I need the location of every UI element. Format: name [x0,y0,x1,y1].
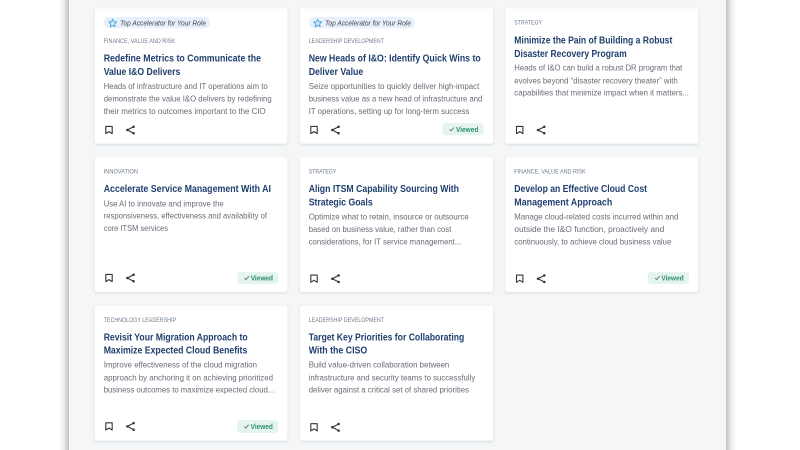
icon: bookmark [311,275,317,282]
card description: infrastructure and security teams to successfully [309,372,476,382]
icon: bookmark [106,423,112,430]
card: Develop Cloud Cost [505,157,698,292]
card title: Management Approach [514,197,612,208]
card: New Heads of I&O [300,8,493,144]
card description: deliver against a critical set of shared priorities [309,385,469,395]
icon: bookmark [311,424,317,431]
category: LEADERSHIP DEVELOPMENT [309,39,384,45]
card description: approach by anchoring it on achieving prioritized [104,372,273,382]
badge: top accelerator: Top Accelerator for Your Role [120,19,206,28]
category: TECHNOLOGY LEADERSHIP [104,318,176,324]
badge: top accelerator [104,17,210,28]
card description: responsiveness, effectiveness and availability of [104,211,268,221]
card: Revisit Migration [94,306,288,441]
icon: share [126,273,135,283]
card title: Accelerate Service Management With AI [104,184,271,195]
card title: Align ITSM Capability Sourcing With [309,184,459,195]
badge: viewed: Viewed [251,274,273,282]
badge: viewed [442,123,484,135]
icon: bookmark [311,126,317,134]
icon: bookmark [516,275,523,282]
category: LEADERSHIP DEVELOPMENT [309,318,384,324]
category: STRATEGY [514,21,542,27]
badge: viewed [648,272,689,284]
card description: continuously, to achieve cloud business value [514,236,671,246]
card description: Heads of infrastructure and IT operations aim to [104,81,268,91]
category: STRATEGY [309,169,336,175]
card description: Build value-driven collaboration between [309,360,449,370]
card description: IT operations, setting up for long-term success [309,106,469,116]
card description: core ITSM services [104,223,168,233]
icon: share [537,125,546,135]
icon: share [126,125,135,135]
icon: bookmark [106,126,112,134]
card: Align ITSM [300,157,493,292]
category: INNOVATION [104,169,138,175]
card description: Improve effectiveness of the cloud migration [104,360,257,370]
card title: Strategic Goals [309,197,373,208]
card title: Redefine Metrics to Communicate the [104,53,261,64]
card title: Disaster Recovery Program [514,49,627,60]
category: FINANCE, VALUE AND RISK [514,169,586,175]
badge: viewed [237,420,278,433]
icon: share [331,125,340,135]
icon: share [331,274,340,283]
card description: Seize opportunities to quickly deliver high-impact [309,81,480,91]
card description: their metrics to outcomes important to the CIO [104,106,266,116]
badge: viewed: Viewed [456,125,479,134]
card title: Deliver Value [309,67,364,78]
card description: capabilities that minimize impact when it matters... [514,88,689,98]
card title: Value I&O Delivers [104,67,181,78]
card description: evolves beyond “disaster recovery theater” with [514,75,678,85]
card title: Revisit Your Migration Approach to [104,332,248,343]
card description: business value as a new head of infrastructure and [309,94,482,104]
badge: top accelerator: Top Accelerator for Your Role [325,19,411,28]
card description: Manage cloud-related costs incurred within and [514,212,678,222]
card title: Maximize Expected Cloud Benefits [104,346,248,357]
icon: share [537,274,546,283]
badge: viewed: Viewed [661,274,684,282]
badge: viewed: Viewed [251,422,273,431]
card description: Optimize what to retain, insource or outsource [309,212,469,222]
card description: outside the I&O function, proactively and [514,224,665,234]
card description: Use AI to innovate and improve the [104,198,224,208]
card: Accelerate Service Management [94,157,288,292]
icon: bookmark [106,274,112,282]
category: FINANCE, VALUE AND RISK [104,39,175,45]
card title: Target Key Priorities for Collaborating [309,332,464,343]
icon: share [331,423,340,432]
badge: top accelerator [309,17,415,28]
card: Minimize the Pain [505,8,698,144]
badge: viewed [237,272,278,284]
card title: Minimize the Pain of Building a Robust [514,35,673,46]
icon: bookmark [516,126,523,134]
icon: share [126,422,135,431]
card: Target Key Priorities [300,306,493,441]
card title: New Heads of I&O: Identify Quick Wins to [309,53,481,64]
card description: demonstrate the value I&O delivers by redefining [104,94,272,104]
card title: With the CISO [309,346,368,357]
card description: Heads of I&O can build a robust DR program that [514,63,683,73]
card title: Develop an Effective Cloud Cost [514,184,648,195]
card: Redefine Metrics [94,8,288,144]
card description: business outcomes to maximize expected cloud... [104,385,274,395]
card description: considerations, for IT service management... [309,236,461,246]
card description: based on business value, rather than cost [309,224,452,234]
